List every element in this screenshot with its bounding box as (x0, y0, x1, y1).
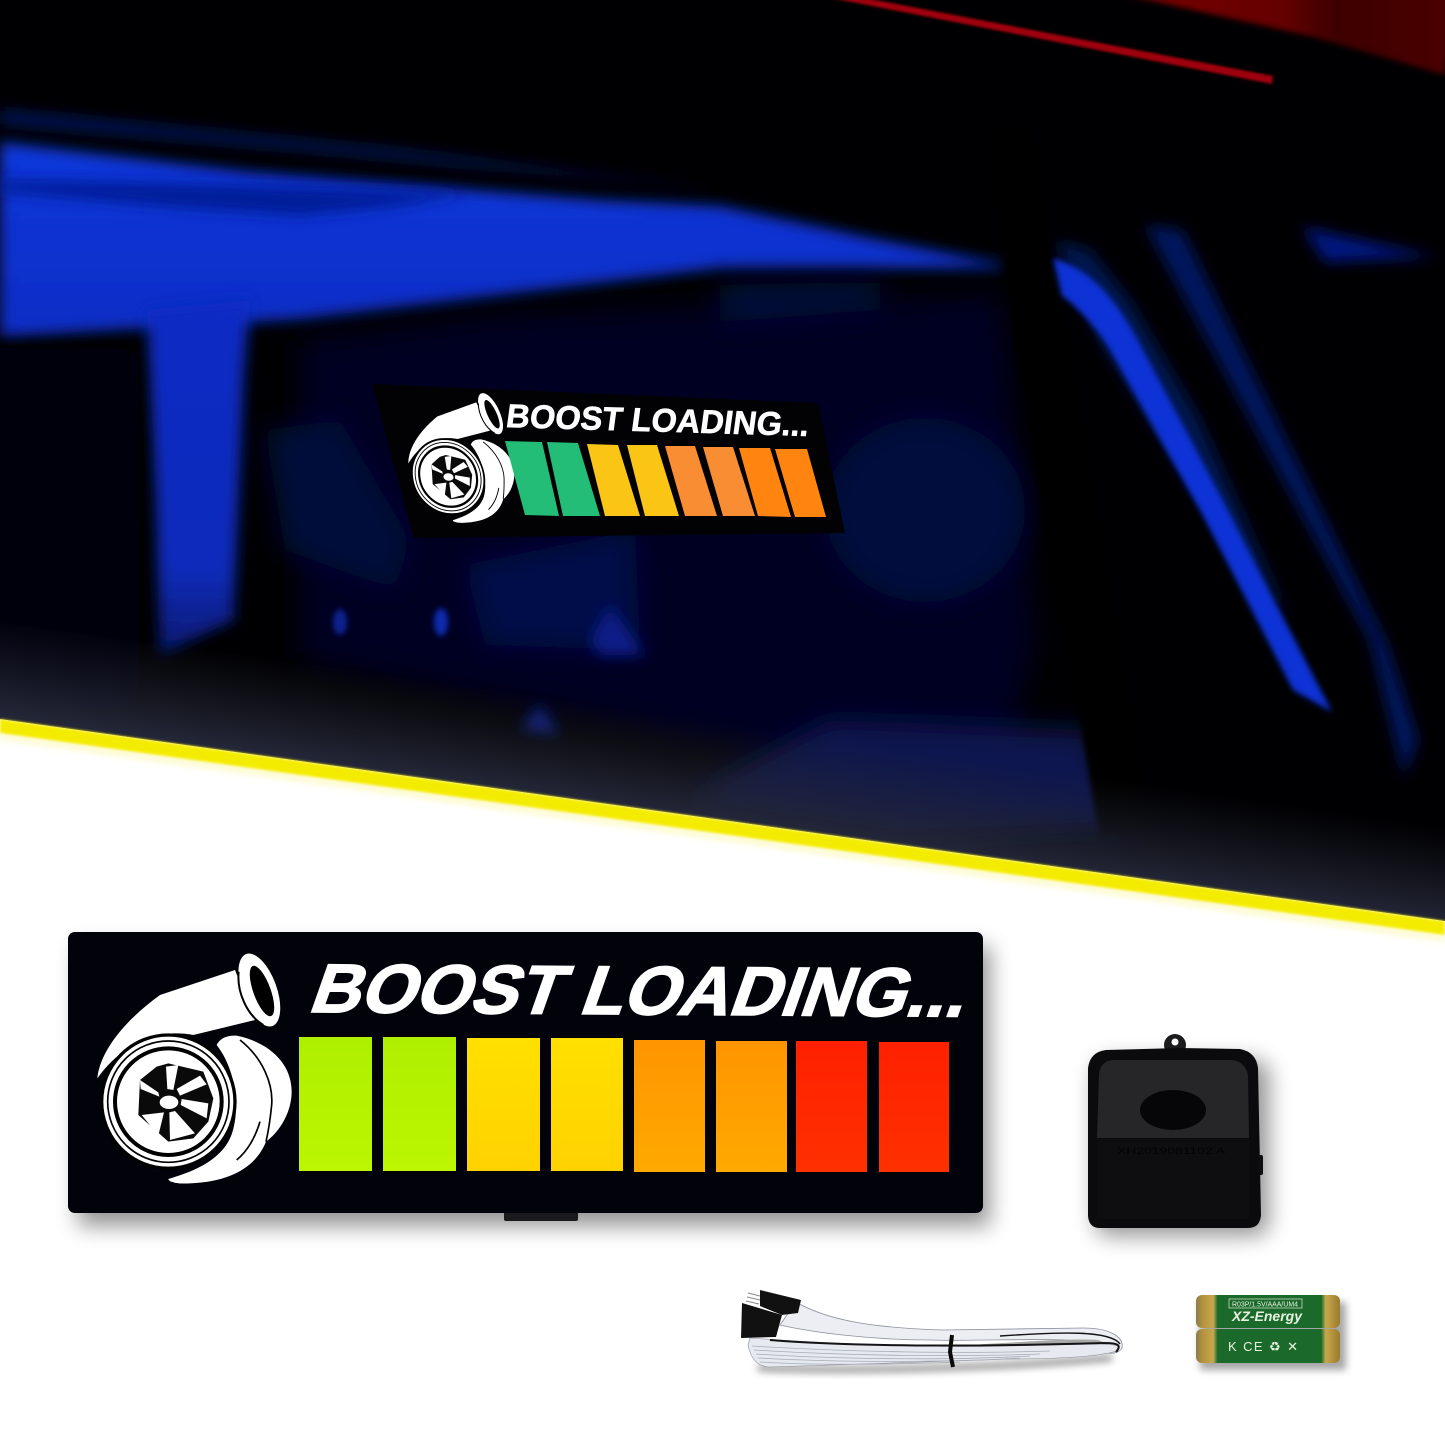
tail light red glow (826, 0, 1445, 84)
door pillar shadow (1004, 260, 1138, 837)
side window recess shapes (0, 348, 138, 663)
rear pillar (147, 300, 250, 655)
panel: product LED sign (68, 932, 990, 1226)
panel: ribbon cable (741, 1290, 1122, 1370)
icon: turbo (97, 948, 292, 1184)
battery spec (1229, 1299, 1302, 1308)
ribbon inner grey loop (970, 1339, 1109, 1352)
panel: AAA batteries (1196, 1295, 1346, 1370)
blue roof light (0, 110, 1002, 337)
ribbon lower strand (748, 1338, 1119, 1367)
panel: glowing sign in car window (372, 384, 845, 538)
product sign title: BOOST LOADING... (302, 951, 983, 1032)
panel: night car interior photo (0, 0, 1445, 940)
panel: battery box (1088, 1034, 1269, 1236)
battery marks: K CE ♻ ✕ (1228, 1339, 1298, 1354)
icon: turbo (408, 393, 514, 523)
battery label: XZ-Energy (1231, 1308, 1303, 1324)
mini sign title: BOOST LOADING... (504, 398, 812, 444)
mini bar segments (505, 441, 826, 517)
dim interior seats (265, 295, 1130, 840)
yellow glowing divider (0, 719, 1445, 942)
ribbon top strand (780, 1302, 1122, 1353)
bottom haze (0, 639, 1445, 921)
connectors (741, 1290, 801, 1338)
window trim blue streak (1053, 225, 1437, 777)
battery spec: R03P/1.5V/AAA/UM4 (1232, 1302, 1298, 1308)
LED level bars (299, 1037, 949, 1172)
embossed model code: XH2019081102 A (1117, 1146, 1225, 1156)
